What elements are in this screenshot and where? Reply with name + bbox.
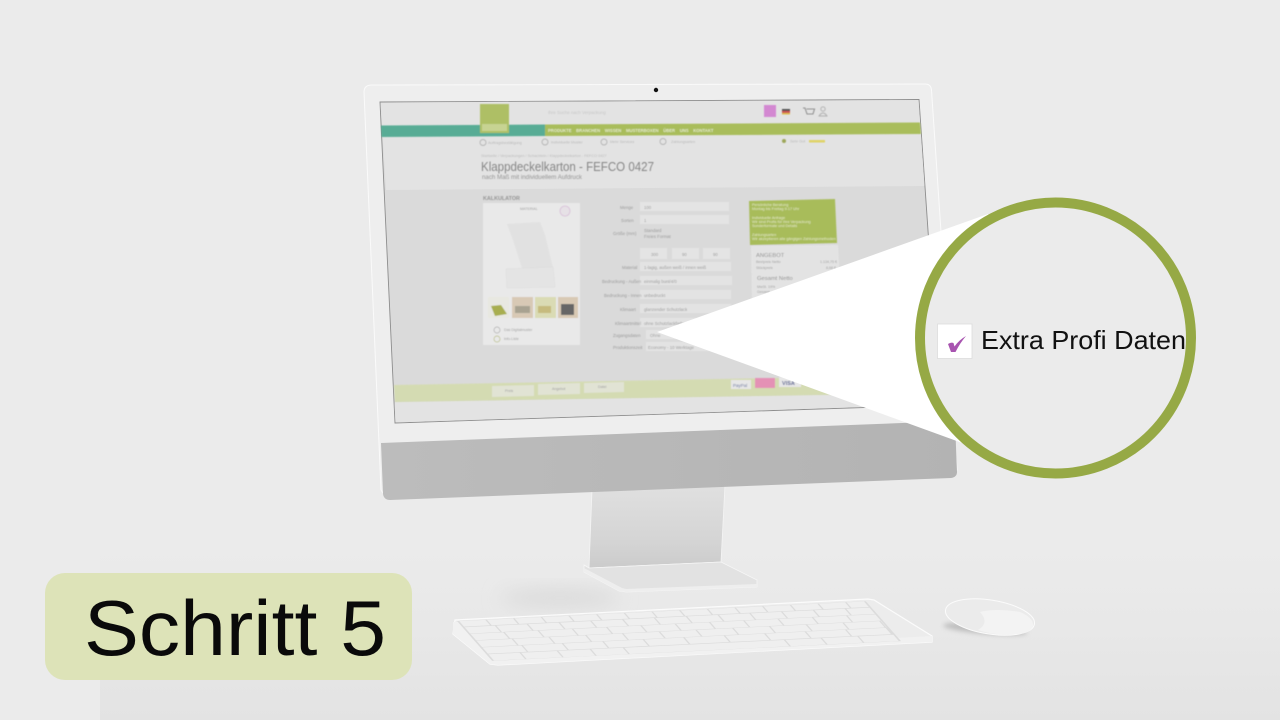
benefits row: Auftragsbestätigung — [488, 141, 522, 145]
benefits row: Sehr Gut — [790, 140, 806, 144]
offer panel: Stückpreis — [756, 266, 773, 270]
configuration form: 100 — [644, 205, 652, 210]
configuration form: Bedruckung - Außen — [602, 279, 642, 284]
offer panel: ANGEBOT — [756, 253, 785, 259]
configuration form: Menge — [620, 205, 634, 210]
benefits row: Mehr Services — [610, 140, 634, 144]
bottom action bar — [394, 375, 939, 402]
keyboard — [453, 599, 932, 665]
configuration form: Zugangsdaten — [613, 333, 641, 338]
screen background — [380, 100, 940, 423]
configuration form: Freies Format — [644, 234, 672, 239]
configuration form: Bedruckung - Innen — [604, 293, 642, 298]
product preview panel: Das Digitalmuster — [504, 328, 533, 332]
configuration form: 90 — [713, 252, 718, 257]
site header — [381, 104, 921, 137]
page heading: nach Maß mit individuellem Aufdruck — [482, 175, 583, 181]
product preview panel — [483, 203, 580, 345]
offer panel: MwSt. 19% — [757, 285, 776, 289]
green info box: Wir sind Profis für Ihre Verpackung — [752, 220, 811, 224]
configuration form: Material — [622, 265, 637, 270]
offer panel: 8,68 € — [826, 266, 836, 270]
monitor stand — [584, 485, 757, 592]
green info box: Montag bis Freitag 9-17 Uhr — [752, 207, 800, 211]
keys — [457, 601, 901, 661]
bottom action bar: Datei — [598, 385, 607, 389]
page heading: Klappdeckelkarton - FEFCO 0427 — [481, 159, 654, 174]
offer panel — [751, 245, 841, 300]
configuration form — [602, 202, 732, 351]
site header: Ihre Suche nach Verpackung — [548, 110, 606, 115]
configuration form: 1-lagig, außen weiß / innen weiß — [644, 265, 706, 270]
webcam — [654, 88, 658, 92]
step title: Schritt 5 — [84, 584, 386, 672]
configuration form: Produktionszeit — [613, 345, 643, 350]
green info box: Wir akzeptieren alle gängigen Zahlungsmethoden — [752, 237, 836, 241]
product preview panel: Info-Liste — [504, 337, 519, 341]
monitor body — [364, 84, 957, 496]
magnifier circle — [920, 202, 1191, 474]
monitor chin — [381, 421, 957, 500]
bottom action bar: Angebot — [552, 387, 565, 391]
product preview panel: MATERIAL — [520, 207, 538, 211]
monitor — [364, 84, 957, 592]
configuration form: Standard — [644, 228, 662, 233]
offer panel: Gesamt — [757, 290, 770, 294]
configuration form: Economy - 10 Werktage — [648, 345, 695, 350]
configuration form: Größe (mm) — [613, 231, 637, 236]
configuration form: ohne Schutzlackfarbe — [644, 321, 686, 326]
check mark — [948, 336, 966, 352]
benefits row: Zahlungsarten — [671, 140, 695, 144]
page heading — [481, 154, 654, 181]
checkbox — [938, 324, 972, 358]
green info box: Individuelle Anfrage — [752, 216, 785, 220]
benefits row — [480, 138, 825, 146]
website screenshot — [381, 104, 939, 402]
configuration form: 1 — [644, 218, 647, 223]
step badge — [45, 573, 412, 680]
configuration form: glanzender Schutzlack — [644, 307, 688, 312]
configuration form: Sorten — [621, 218, 634, 223]
bottom action bar: Preis — [505, 389, 513, 393]
green info box: Zahlungsarten — [752, 233, 776, 237]
bottom action bar: PayPal — [733, 383, 747, 388]
configuration form: 300 — [651, 252, 659, 257]
configuration form: 90 — [682, 252, 687, 257]
green info box: Persönliche Beratung — [752, 203, 788, 207]
offer panel: Bestpreis Netto — [756, 260, 781, 264]
configuration form: Klimaartmittel — [615, 321, 641, 326]
offer panel: Gesamt Netto — [757, 276, 793, 282]
configuration form: Klimaart — [620, 307, 637, 312]
green info box — [749, 199, 837, 245]
configuration form: unbedruckt — [644, 293, 666, 298]
mouse — [943, 593, 1037, 641]
site header: PRODUKTE BRANCHEN WISSEN MUSTERBOXEN ÜBER UNS KONTAKT — [548, 128, 714, 133]
bottom action bar: VISA — [782, 381, 795, 387]
magnifier label: Extra Profi Daten — [981, 325, 1186, 355]
configuration form: einmalig bunt/4/0 — [644, 279, 677, 284]
callout wedge — [657, 214, 1000, 444]
green info box: Sonderformate und Details — [752, 224, 797, 228]
calculator label: KALKULATOR — [483, 196, 520, 202]
configuration form: Ohne — [650, 333, 661, 338]
benefits row: Individuelle Muster — [551, 140, 583, 144]
screen — [380, 100, 940, 423]
offer panel: 1.134,75 € — [820, 260, 837, 264]
page heading: Startseite / Verpackungen / Schachteln / Klappdeckelkarton - FEFCO 0427 — [481, 154, 607, 158]
